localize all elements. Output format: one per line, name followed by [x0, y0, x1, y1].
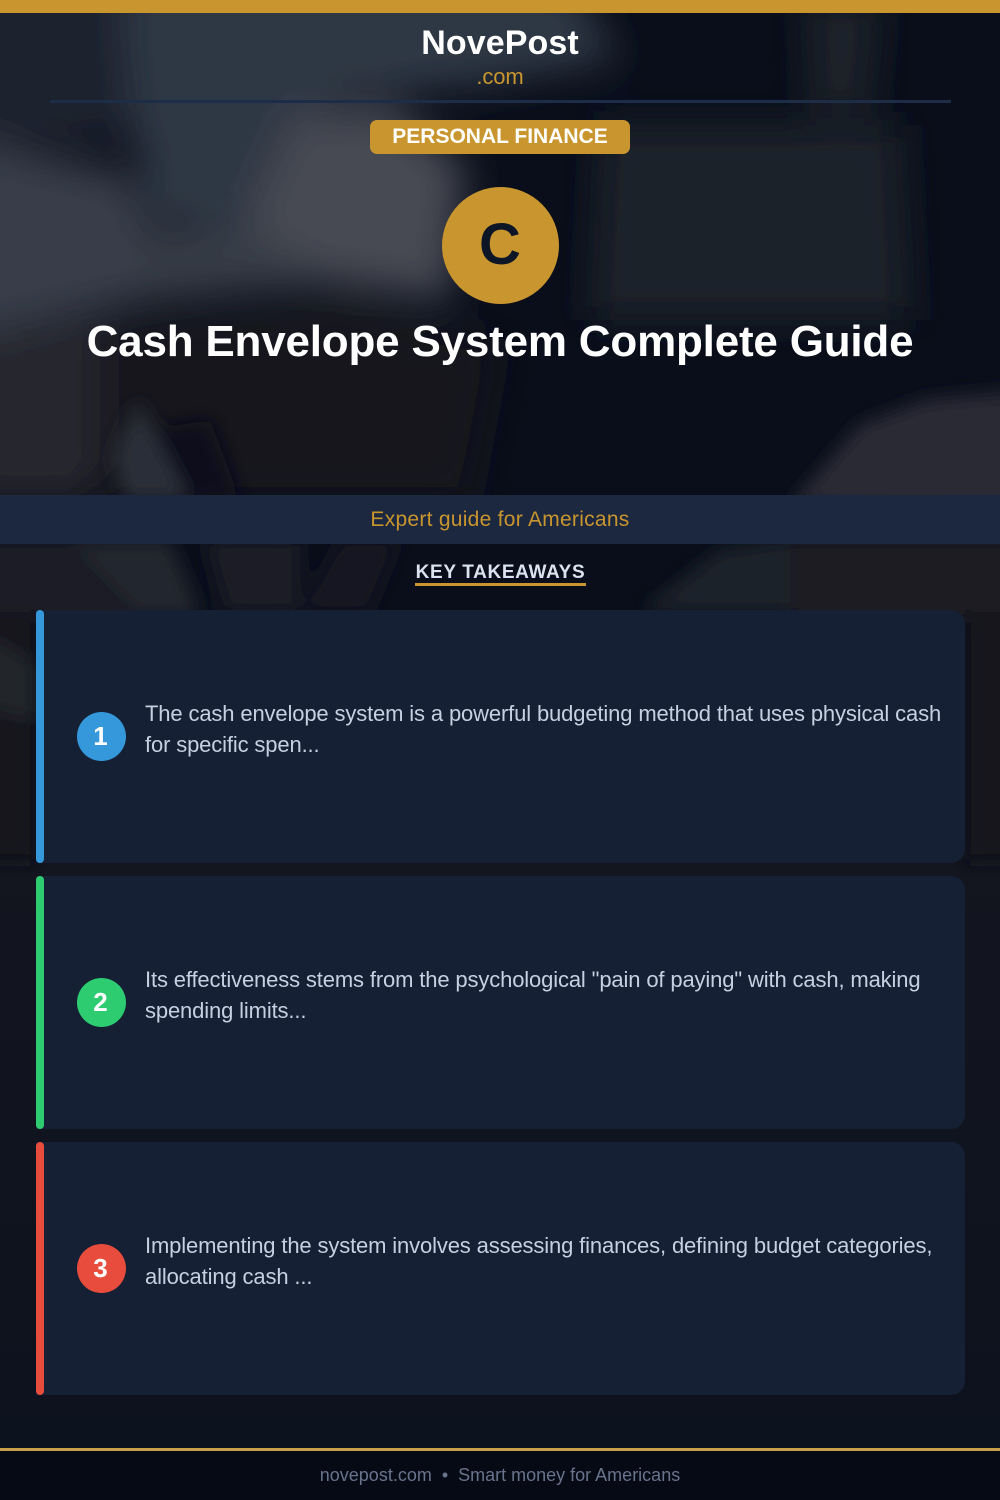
header divider: [50, 100, 951, 103]
takeaway text 2: Its effectiveness stems from the psychological "pain of paying" with cash, making spending limits...: [145, 967, 920, 1023]
number badge 3: 3: [93, 1253, 108, 1283]
number badge 3: [77, 1244, 126, 1293]
brand suffix: .com: [476, 64, 524, 89]
panel: takeaway 1: [36, 610, 965, 863]
accent bar 1: [36, 610, 44, 863]
panel: takeaway 3: [36, 1142, 965, 1395]
title: Cash Envelope System Complete Guide: [87, 317, 913, 366]
subtitle band: Expert guide for Americans: [370, 508, 630, 531]
brand name: NovePost: [421, 24, 579, 62]
number badge 2: 2: [93, 987, 108, 1017]
icon: letter circle: [442, 187, 559, 304]
footer: novepost.com • Smart money for Americans: [320, 1465, 680, 1485]
panel: takeaway 2: [36, 876, 965, 1129]
icon: letter circle: C: [479, 212, 521, 277]
top accent bar: [0, 0, 1000, 13]
accent bar 2: [36, 876, 44, 1129]
category badge: [370, 120, 630, 154]
accent bar 3: [36, 1142, 44, 1395]
subtitle band: [0, 495, 1000, 544]
section heading: key takeaways: KEY TAKEAWAYS: [416, 562, 585, 583]
number badge 2: [77, 978, 126, 1027]
number badge 1: [77, 712, 126, 761]
number badge 1: 1: [93, 721, 108, 751]
category badge: PERSONAL FINANCE: [392, 125, 608, 148]
takeaway text 3: Implementing the system involves assessing finances, defining budget categories, allocating cash ...: [145, 1233, 932, 1289]
footer: [0, 1448, 1000, 1500]
takeaway text 1: The cash envelope system is a powerful budgeting method that uses physical cash for specific spen...: [145, 701, 941, 757]
